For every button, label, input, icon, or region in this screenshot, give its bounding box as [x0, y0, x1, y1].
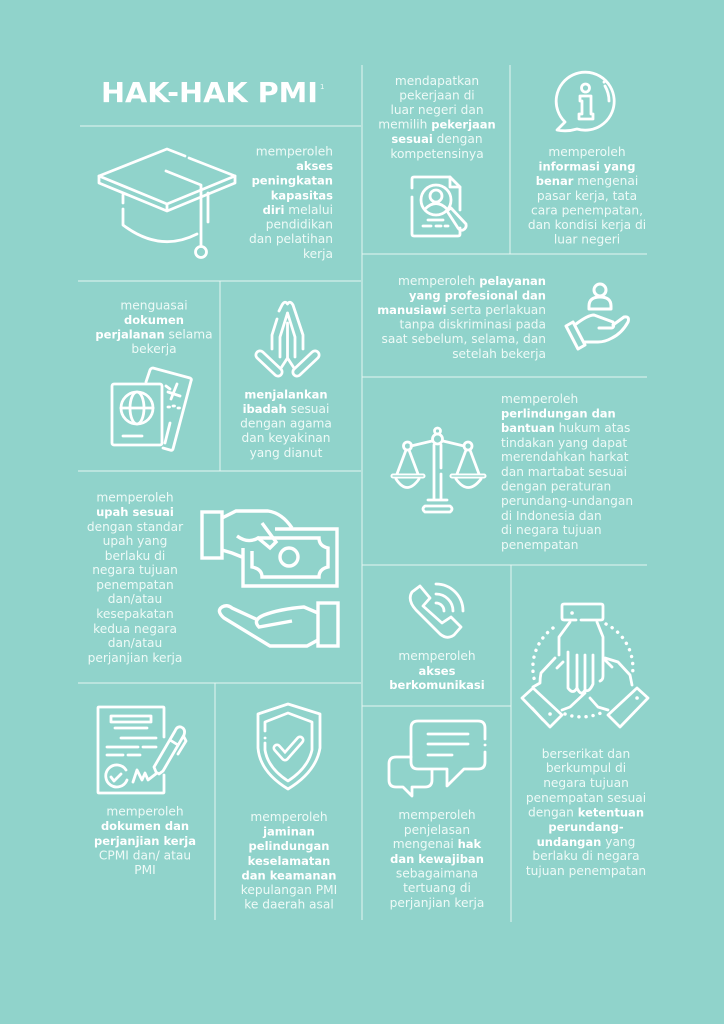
- panel: informasi yang benar: [528, 72, 646, 246]
- text: berserikat dan berkumpul: penempatan sesuai: [526, 791, 646, 805]
- icon: document search: [412, 177, 466, 236]
- text: berserikat dan berkumpul: negara tujuan: [543, 776, 629, 790]
- text: menjalankan ibadah: ibadah sesuai: [243, 402, 329, 416]
- text: menjalankan ibadah: dengan agama: [240, 416, 332, 430]
- text: perlindungan dan bantuan: di negara tujuan: [501, 523, 602, 537]
- text: jaminan keselamatan: memperoleh: [250, 810, 328, 824]
- text: akses peningkatan kapasitas: kapasitas: [271, 188, 333, 202]
- text: menjalankan ibadah: menjalankan: [244, 388, 328, 402]
- text: akses peningkatan kapasitas: [249, 144, 333, 261]
- icon: person on hand: [566, 284, 628, 349]
- text: jaminan keselamatan: pelindungan: [249, 839, 329, 853]
- text: upah sesuai: [87, 490, 184, 665]
- icon: money exchange hands: [202, 511, 338, 646]
- panel: jaminan keselamatan: [241, 704, 337, 912]
- text: jaminan keselamatan: kepulangan PMI: [241, 883, 337, 897]
- text: akses peningkatan kapasitas: peningkatan: [252, 174, 333, 188]
- text: hak dan kewajiban: mengenai hak: [393, 837, 482, 851]
- text: akses berkomunikasi: akses: [419, 664, 456, 678]
- text: dokumen perjalanan: bekerja: [131, 342, 177, 356]
- text: upah sesuai: perjanjian kerja: [88, 651, 182, 665]
- text: akses berkomunikasi: memperoleh: [398, 649, 476, 663]
- text: informasi yang benar: luar negeri: [554, 232, 620, 246]
- text: pekerjaan sesuai: mendapatkan: [395, 74, 479, 88]
- text: dokumen dan perjanjian kerja: memperoleh: [106, 804, 184, 818]
- text: akses peningkatan kapasitas: diri melalui: [263, 203, 333, 217]
- text: berserikat dan berkumpul: dengan ketentuan: [528, 806, 644, 820]
- text: hak dan kewajiban: memperoleh: [398, 808, 476, 822]
- text: upah sesuai: dan/atau: [108, 636, 162, 650]
- text: dokumen perjalanan: menguasai: [120, 298, 188, 312]
- icon: scales of justice: [393, 428, 484, 512]
- text: hak dan kewajiban: perjanjian kerja: [390, 896, 484, 910]
- text: pekerjaan sesuai: memilih pekerjaan: [378, 118, 496, 132]
- text: berserikat dan berkumpul: undangan yang: [537, 835, 635, 849]
- text: dokumen perjalanan: dokumen: [124, 313, 184, 327]
- text: perlindungan dan bantuan: merendahkan harkat: [501, 450, 629, 464]
- text: hak dan kewajiban: [390, 808, 484, 910]
- title: 1: [320, 83, 324, 91]
- text: dokumen perjalanan: [95, 298, 213, 356]
- text: pelayanan profesional: tanpa diskriminasi pada: [400, 318, 546, 332]
- text: dokumen dan perjanjian kerja: CPMI dan/ atau: [99, 848, 191, 862]
- text: informasi yang benar: pasar kerja, tata: [537, 189, 637, 203]
- text: dokumen dan perjanjian kerja: [94, 804, 196, 877]
- text: akses berkomunikasi: berkomunikasi: [389, 678, 485, 692]
- text: jaminan keselamatan: dan keamanan: [242, 868, 336, 882]
- panel: hak dan kewajiban: [389, 721, 485, 910]
- text: perlindungan dan bantuan: bantuan hukum atas: [501, 421, 630, 435]
- text: perlindungan dan bantuan: [501, 392, 633, 552]
- text: pekerjaan sesuai: luar negeri dan: [390, 103, 484, 117]
- text: perlindungan dan bantuan: memperoleh: [501, 392, 578, 406]
- text: perlindungan dan bantuan: tindakan yang dapat: [501, 436, 627, 450]
- text: pelayanan profesional: saat sebelum, selama, dan: [382, 332, 546, 346]
- text: berserikat dan berkumpul: berkumpul di: [546, 761, 626, 775]
- title: HAK-HAK PMI: [101, 77, 318, 109]
- text: dokumen dan perjanjian kerja: perjanjian kerja: [94, 834, 196, 848]
- text: pelayanan profesional: yang profesional dan: [409, 288, 546, 302]
- text: upah sesuai: kedua negara: [93, 622, 177, 636]
- panel: berserikat dan berkumpul: [522, 604, 648, 878]
- text: informasi yang benar: cara penempatan,: [531, 204, 643, 218]
- text: upah sesuai: upah sesuai: [96, 505, 174, 519]
- text: jaminan keselamatan: [241, 810, 337, 912]
- text: menjalankan ibadah: dan keyakinan: [242, 431, 330, 445]
- text: berserikat dan berkumpul: tujuan penempatan: [526, 864, 646, 878]
- text: pelayanan profesional: setelah bekerja: [452, 347, 546, 361]
- icon: graduation cap: [99, 149, 235, 258]
- text: akses peningkatan kapasitas: akses: [296, 159, 333, 173]
- text: pelayanan profesional: memperoleh pelayanan: [398, 274, 546, 288]
- panel: menjalankan ibadah: [240, 302, 332, 460]
- text: hak dan kewajiban: sebagaimana: [396, 866, 478, 880]
- text: perlindungan dan bantuan: dengan peraturan: [501, 480, 611, 494]
- text: upah sesuai: negara tujuan: [92, 563, 178, 577]
- text: pekerjaan sesuai: pekerjaan di: [399, 88, 475, 102]
- icon: shield with check: [258, 704, 320, 789]
- text: upah sesuai: upah yang: [103, 534, 167, 548]
- text: akses berkomunikasi: [389, 649, 485, 692]
- text: upah sesuai: dan/atau: [108, 592, 162, 606]
- text: informasi yang benar: [528, 145, 646, 246]
- panel: akses berkomunikasi: [389, 584, 485, 692]
- text: menjalankan ibadah: yang dianut: [250, 446, 323, 460]
- icon: praying hands: [260, 302, 315, 372]
- text: pekerjaan sesuai: kompetensinya: [390, 147, 484, 161]
- text: berserikat dan berkumpul: perundang-: [548, 820, 624, 834]
- text: upah sesuai: dengan standar: [87, 520, 184, 534]
- text: upah sesuai: kesepakatan: [96, 607, 174, 621]
- text: berserikat dan berkumpul: [526, 747, 646, 878]
- icon: phone with signal: [410, 584, 463, 637]
- text: dokumen dan perjanjian kerja: PMI: [134, 863, 156, 877]
- text: akses peningkatan kapasitas: pendidikan: [266, 218, 333, 232]
- icon: signed contract: [98, 707, 186, 793]
- text: upah sesuai: berlaku di: [105, 549, 165, 563]
- panel: pelayanan profesional: [377, 274, 628, 361]
- text: dokumen perjalanan: perjalanan selama: [95, 328, 213, 342]
- icon: info speech bubble: [556, 72, 614, 131]
- panel: dokumen perjalanan: [95, 298, 213, 450]
- text: menjalankan ibadah: [240, 388, 332, 460]
- text: informasi yang benar: dan kondisi kerja di: [528, 218, 646, 232]
- text: perlindungan dan bantuan: di Indonesia dan: [501, 509, 602, 523]
- text: akses peningkatan kapasitas: dan pelatihan: [249, 232, 333, 246]
- text: berserikat dan berkumpul: berlaku di negara: [532, 849, 640, 863]
- text: berserikat dan berkumpul: berserikat dan: [542, 747, 630, 761]
- icon: passport and ticket: [112, 368, 191, 450]
- text: pekerjaan sesuai: sesuai dengan: [391, 132, 483, 146]
- text: akses peningkatan kapasitas: memperoleh: [256, 144, 333, 158]
- text: hak dan kewajiban: tertuang di: [403, 881, 471, 895]
- text: perlindungan dan bantuan: dan martabat sesuai: [501, 465, 627, 479]
- text: pelayanan profesional: [377, 274, 546, 361]
- text: dokumen dan perjanjian kerja: dokumen dan: [101, 819, 189, 833]
- panel: upah sesuai: [87, 490, 338, 665]
- text: upah sesuai: memperoleh: [96, 490, 174, 504]
- text: jaminan keselamatan: ke daerah asal: [244, 898, 334, 912]
- text: pelayanan profesional: manusiawi serta perlakuan: [377, 303, 546, 317]
- text: hak dan kewajiban: dan kewajiban: [390, 852, 484, 866]
- panel: dokumen perjanjian kerja: [94, 707, 196, 877]
- text: jaminan keselamatan: jaminan: [262, 824, 315, 838]
- text: informasi yang benar: benar mengenai: [536, 174, 638, 188]
- text: informasi yang benar: informasi yang: [539, 160, 635, 174]
- text: pekerjaan sesuai: [378, 74, 496, 161]
- icon: joined hands in circle: [522, 604, 648, 727]
- text: akses peningkatan kapasitas: kerja: [303, 247, 333, 261]
- text: perlindungan dan bantuan: penempatan: [501, 538, 579, 552]
- icon: speech bubbles: [389, 721, 485, 796]
- text: perlindungan dan bantuan: perundang-undangan: [501, 494, 633, 508]
- text: upah sesuai: penempatan: [96, 578, 174, 592]
- text: jaminan keselamatan: keselamatan: [248, 854, 330, 868]
- panel: perlindungan dan bantuan: [393, 392, 633, 552]
- panel: pekerjaan sesuai: [378, 74, 496, 236]
- text: informasi yang benar: memperoleh: [548, 145, 626, 159]
- text: perlindungan dan bantuan: perlindungan dan: [501, 406, 616, 420]
- text: hak dan kewajiban: penjelasan: [404, 823, 470, 837]
- panel: peningkatan kapasitas: [99, 144, 333, 261]
